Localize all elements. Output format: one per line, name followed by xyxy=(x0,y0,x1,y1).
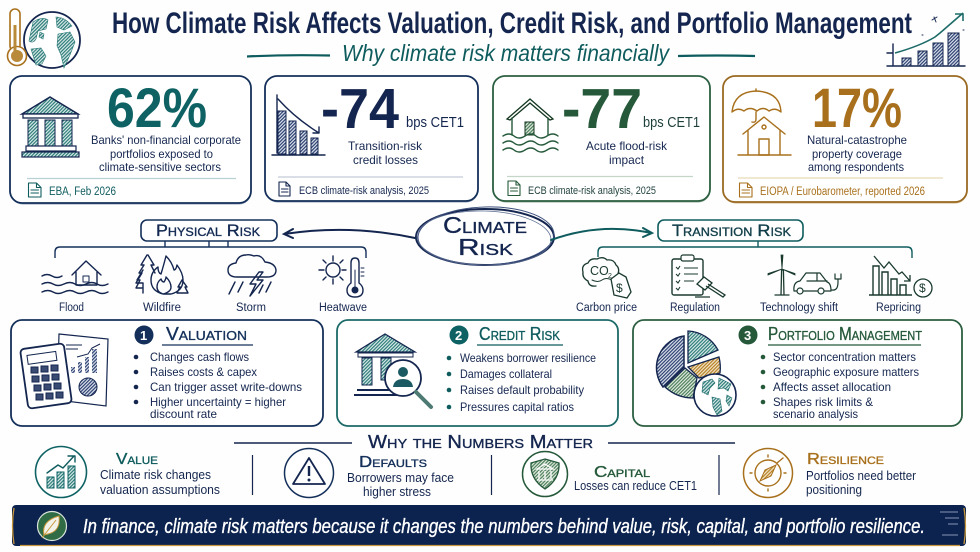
icon: heatwave xyxy=(319,256,364,297)
source xyxy=(279,182,429,197)
description xyxy=(91,133,241,174)
item: resilience xyxy=(744,448,916,498)
panel: minus 74 stat xyxy=(265,76,478,202)
bullet list: Shapes risk limits & xyxy=(773,395,873,409)
icon: technology shift xyxy=(768,255,841,295)
heading: transition risk: Transition Risk xyxy=(672,221,791,240)
bullet list: Sector concentration matters xyxy=(773,350,916,364)
badge: 2 xyxy=(450,326,468,344)
arrow: to transition risk xyxy=(551,228,652,240)
label: regulation: Regulation xyxy=(670,302,720,314)
panel: credit risk xyxy=(337,320,618,426)
label: technology shift: Technology shift xyxy=(760,302,839,314)
arrow: to physical risk xyxy=(284,229,415,238)
item: defaults xyxy=(284,448,454,499)
bullet list: Higher uncertainty = higher xyxy=(150,395,286,409)
bullet list: scenario analysis xyxy=(773,407,858,421)
bullet list: Weakens borrower resilience xyxy=(460,351,596,365)
item: resilience: Resilience xyxy=(807,451,884,468)
icon: storm xyxy=(228,255,276,296)
description: property coverage xyxy=(812,147,902,161)
description xyxy=(807,133,907,174)
icon: bank xyxy=(22,97,79,157)
bullet list: Damages collateral xyxy=(460,367,552,381)
source: EBA, Feb 2026 xyxy=(49,186,116,198)
description: portfolios exposed to xyxy=(110,147,213,161)
climate risk hub xyxy=(416,205,555,267)
stat value: 17% xyxy=(812,76,902,139)
label: flood: Flood xyxy=(59,302,84,314)
description: impact xyxy=(609,153,645,167)
source xyxy=(28,183,116,198)
icon: umbrella over house xyxy=(732,89,791,155)
icon: wildfire xyxy=(136,255,188,294)
item: capital: Capital xyxy=(594,464,650,481)
icon: repricing xyxy=(869,256,932,297)
bullet list xyxy=(134,350,302,421)
icon: flooded house xyxy=(503,99,558,152)
source: EIOPA / Eurobarometer, reported 2026 xyxy=(760,186,925,198)
unit: bps CET1 xyxy=(643,115,700,131)
description: Transition-risk xyxy=(348,139,423,153)
icon: carbon price xyxy=(583,258,631,298)
item: value xyxy=(36,446,220,498)
panel: 62 percent stat xyxy=(10,76,251,204)
bullet list: Can trigger asset write-downs xyxy=(150,380,302,394)
description: Banks' non-financial corporate xyxy=(91,133,241,147)
heading: physical risk: Physical Risk xyxy=(156,221,260,240)
label: carbon price: Carbon price xyxy=(576,302,637,314)
subtitle: Why climate risk matters financially xyxy=(342,40,670,66)
item: capital: Losses can reduce CET1 xyxy=(574,479,697,493)
bullet list: Raises default probability xyxy=(460,383,584,397)
item: value: Climate risk changes xyxy=(100,468,211,482)
panel: valuation xyxy=(11,320,323,426)
source: ECB climate-risk analysis, 2025 xyxy=(299,185,429,197)
stat value: -74 xyxy=(321,77,399,141)
item: resilience: Portfolios need better xyxy=(806,469,916,483)
badge: 1: 1 xyxy=(140,328,147,343)
icon: falling bars xyxy=(272,95,325,155)
item: defaults: Borrowers may face xyxy=(347,471,454,485)
icon: pie chart and globe xyxy=(657,331,736,416)
item: value: Value xyxy=(116,451,158,468)
badge: 3 xyxy=(738,326,758,344)
description: among respondents xyxy=(808,160,904,174)
heading: credit risk: Credit Risk xyxy=(479,324,560,344)
climate risk hub: Risk xyxy=(458,234,513,260)
bullet list: Raises costs & capex xyxy=(150,365,257,379)
panel: 17 percent stat xyxy=(723,76,967,203)
heading: valuation: Valuation xyxy=(166,324,247,344)
label: heatwave: Heatwave xyxy=(319,302,367,314)
bullet list: Pressures capital ratios xyxy=(460,400,574,414)
item: resilience: positioning xyxy=(806,483,862,497)
label: storm: Storm xyxy=(236,302,266,314)
panel: portfolio management xyxy=(633,320,962,426)
bullet list: Affects asset allocation xyxy=(773,380,891,394)
badge: 1 xyxy=(134,326,154,344)
label: repricing: Repricing xyxy=(876,302,921,314)
icon: carbon price: 2 xyxy=(608,273,612,280)
description: climate-sensitive sectors xyxy=(99,160,221,174)
bullet list xyxy=(447,351,596,414)
icon: rising bar chart xyxy=(887,13,965,66)
bullet list: discount rate xyxy=(150,407,217,421)
icon: repricing: $ xyxy=(919,281,926,295)
item: defaults: Defaults xyxy=(359,454,427,471)
description: Natural-catastrophe xyxy=(807,133,907,147)
icon: regulation xyxy=(672,255,725,297)
source: ECB climate-risk analysis, 2025 xyxy=(528,185,656,197)
item: value: valuation assumptions xyxy=(100,483,220,497)
heading: transition risk xyxy=(658,220,803,241)
badge: 3: 3 xyxy=(744,328,751,343)
bullet list: Geographic exposure matters xyxy=(773,365,919,379)
badge: 2: 2 xyxy=(455,328,462,343)
icon: leaf xyxy=(38,512,66,540)
panel: minus 77 stat xyxy=(493,76,710,202)
bullet list: Changes cash flows xyxy=(150,350,249,364)
description: Acute flood-risk xyxy=(586,139,668,153)
item: capital xyxy=(522,452,697,496)
unit: bps CET1 xyxy=(406,115,464,131)
stat value: 62% xyxy=(107,76,207,139)
item: defaults: higher stress xyxy=(363,485,431,499)
heading: physical risk xyxy=(141,220,277,241)
heading: why the numbers matter: Why the Numbers Matter xyxy=(368,432,593,452)
icon: carbon price: CO xyxy=(590,264,609,278)
banner xyxy=(12,505,966,546)
source xyxy=(740,183,925,198)
icon: calculator and report xyxy=(20,334,108,409)
description xyxy=(348,139,423,167)
icon: flood xyxy=(42,261,108,294)
icon: carbon price: $ xyxy=(616,281,623,295)
heading: portfolio management: Portfolio Management xyxy=(768,324,922,344)
description: credit losses xyxy=(353,153,418,167)
description xyxy=(586,139,668,167)
icon: thermometer and globe xyxy=(8,9,80,68)
source xyxy=(508,181,656,197)
climate risk hub: Climate xyxy=(443,212,527,238)
stat value: -77 xyxy=(562,77,642,141)
label: wildfire: Wildfire xyxy=(143,302,181,314)
icon: bank with magnifier xyxy=(354,334,431,407)
bullet list xyxy=(761,350,919,421)
